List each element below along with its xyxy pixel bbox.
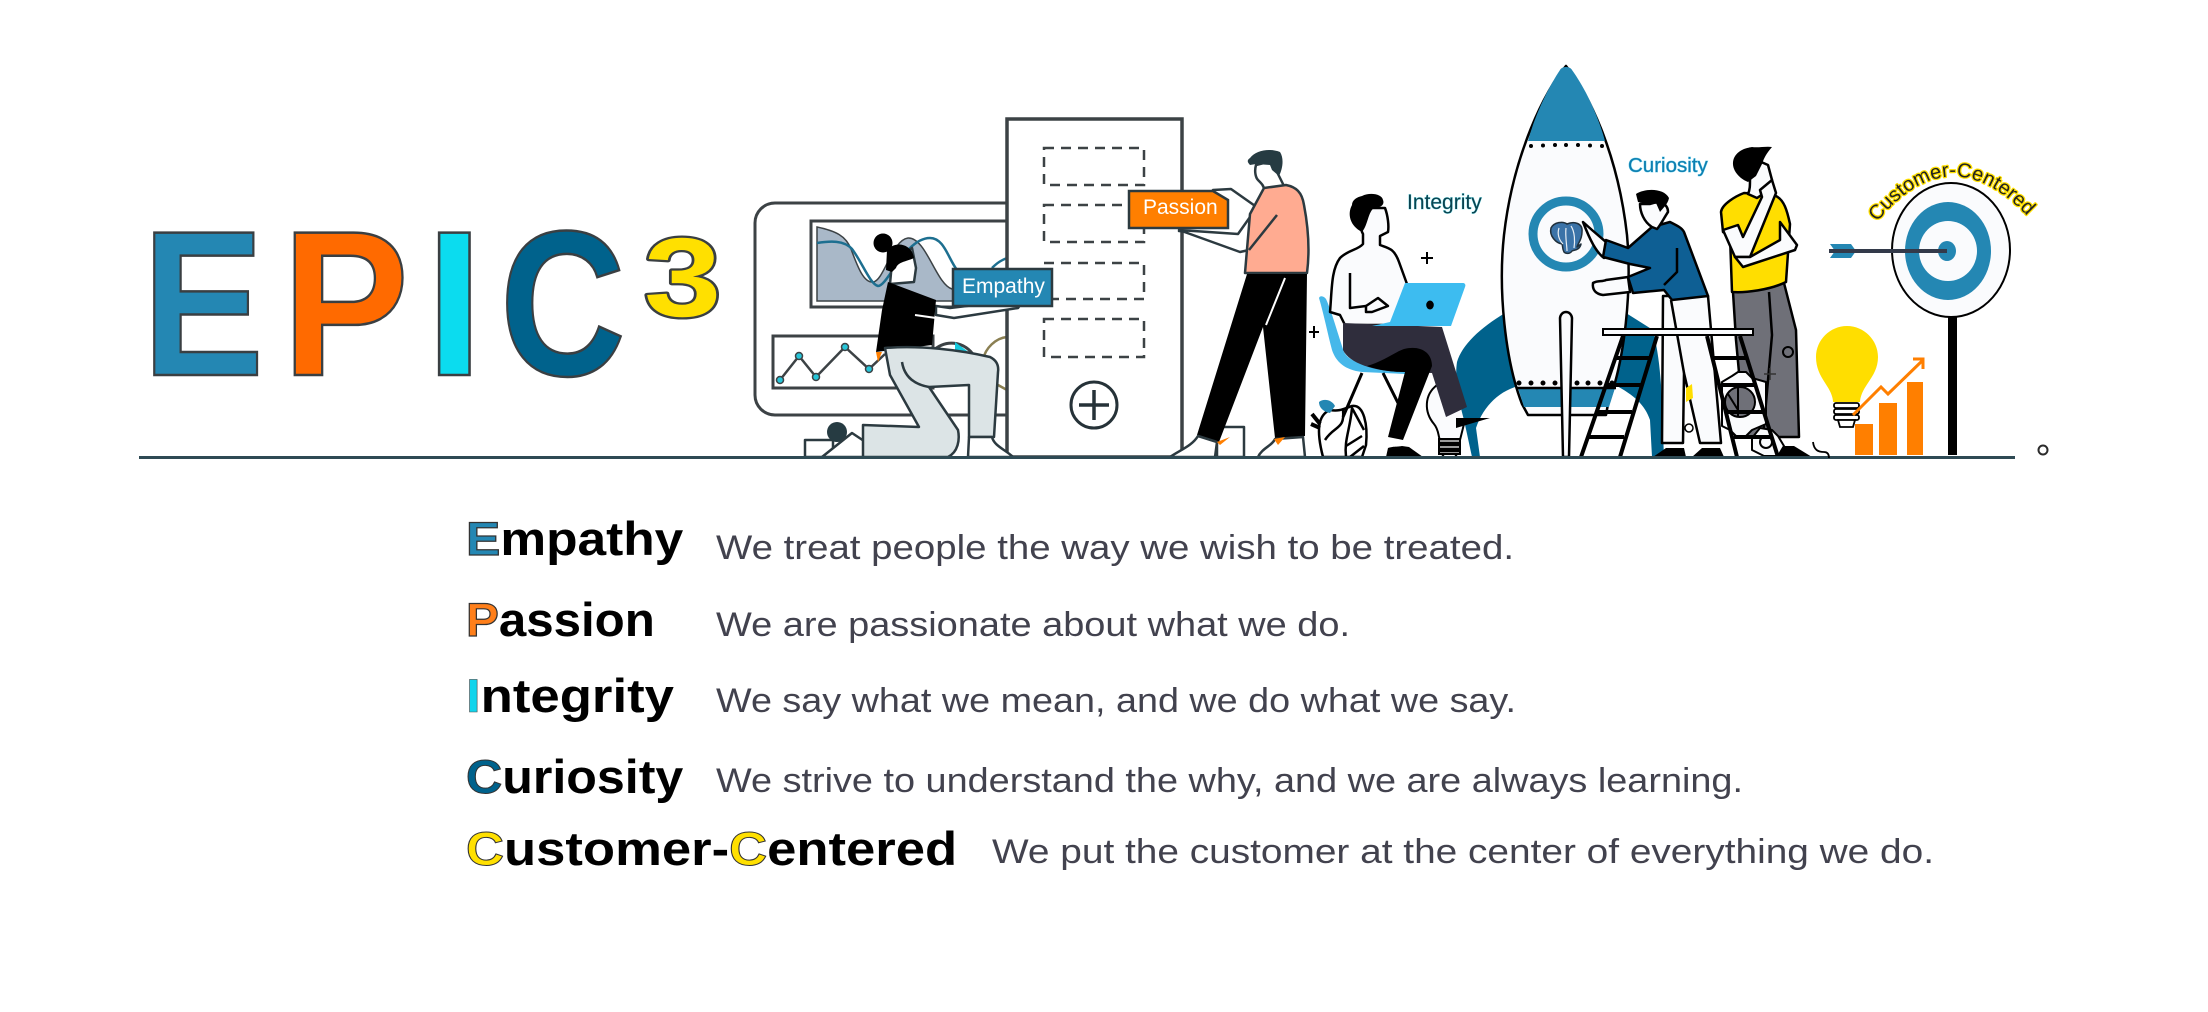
figure: kneeling woman: [805, 234, 1022, 457]
rocket fins: [1456, 313, 1664, 457]
illustration: monitor with charts: [755, 203, 1055, 415]
letter I: I: [425, 189, 484, 420]
figure: man with orange shirt: [1170, 150, 1308, 457]
value row: Integrity: [466, 670, 1516, 722]
illustration: rocket: [1502, 66, 1629, 457]
value row: Customer-Centered: Customer-Centered: [466, 823, 957, 875]
label: Empathy: Empathy: [962, 275, 1045, 298]
label: Passion: [1129, 191, 1228, 228]
values list: [466, 513, 1934, 875]
letter E: E: [142, 189, 264, 419]
value row: Curiosity: Curiosity: [466, 751, 683, 804]
rocket porthole ring: [1533, 201, 1599, 267]
value row: Curiosity: We strive to understand the why, and we are always learning.: [716, 762, 1743, 800]
illustration: ladder table: [1581, 329, 1778, 457]
superscript 3: 3: [644, 215, 721, 340]
illustration: door panel with dashed slots: [1007, 119, 1182, 457]
icon: yellow light bulb: [1816, 326, 1878, 427]
value row: Passion: Passion: [466, 594, 655, 647]
label: Customer-Centered: Customer-Centered: [1868, 162, 2038, 220]
label: Curiosity: Curiosity: [1628, 154, 1708, 177]
value row: Empathy: Empathy: [466, 513, 684, 565]
value row: Empathy: [466, 513, 1514, 567]
icon: plant: [1311, 400, 1366, 457]
rocket nose cone: [1528, 67, 1605, 141]
letter P: P: [282, 189, 409, 420]
label: Integrity: Integrity: [1407, 191, 1482, 214]
icon: arrow: [1829, 244, 1947, 258]
icon: plus in circle: [1071, 382, 1117, 428]
label: Empathy: [953, 269, 1052, 306]
letter C: C: [500, 188, 626, 419]
value row: Passion: We are passionate about what we do.: [716, 606, 1350, 644]
label: Passion: Passion: [1143, 196, 1218, 219]
bar chart: orange rising bars: [1853, 359, 1923, 455]
value row: Integrity: Integrity: [466, 670, 674, 722]
icon: sparkle plus: [1309, 326, 1319, 338]
figure: seated man with laptop: [1309, 194, 1490, 457]
ground line: [139, 442, 2048, 459]
icon: gears behind ladder: [1722, 372, 1784, 456]
value row: Curiosity: [466, 751, 1743, 804]
value row: Empathy: We treat people the way we wish to be treated.: [716, 529, 1514, 567]
icon: sparkle plus: [1421, 252, 1433, 264]
icon: elephant logo: [1551, 222, 1582, 253]
rocket centre fin: [1560, 312, 1572, 457]
icon: target on post: [1829, 183, 2010, 455]
icon: outline light bulb: [1427, 385, 1470, 457]
value row: Customer-Centered: [466, 823, 1934, 875]
title: EPIC cubed logo: [142, 188, 721, 420]
figure: thinking man in yellow shirt: [1721, 147, 1812, 457]
value row: Integrity: We say what we mean, and we do what we say.: [716, 682, 1516, 720]
figure: man in blue shirt pointing at rocket: [1583, 190, 1724, 457]
value row: Customer-Centered: We put the customer at the center of everything we do.: [992, 833, 1934, 871]
value row: Passion: [466, 594, 1350, 647]
icon: trend arrow: [1853, 359, 1923, 415]
